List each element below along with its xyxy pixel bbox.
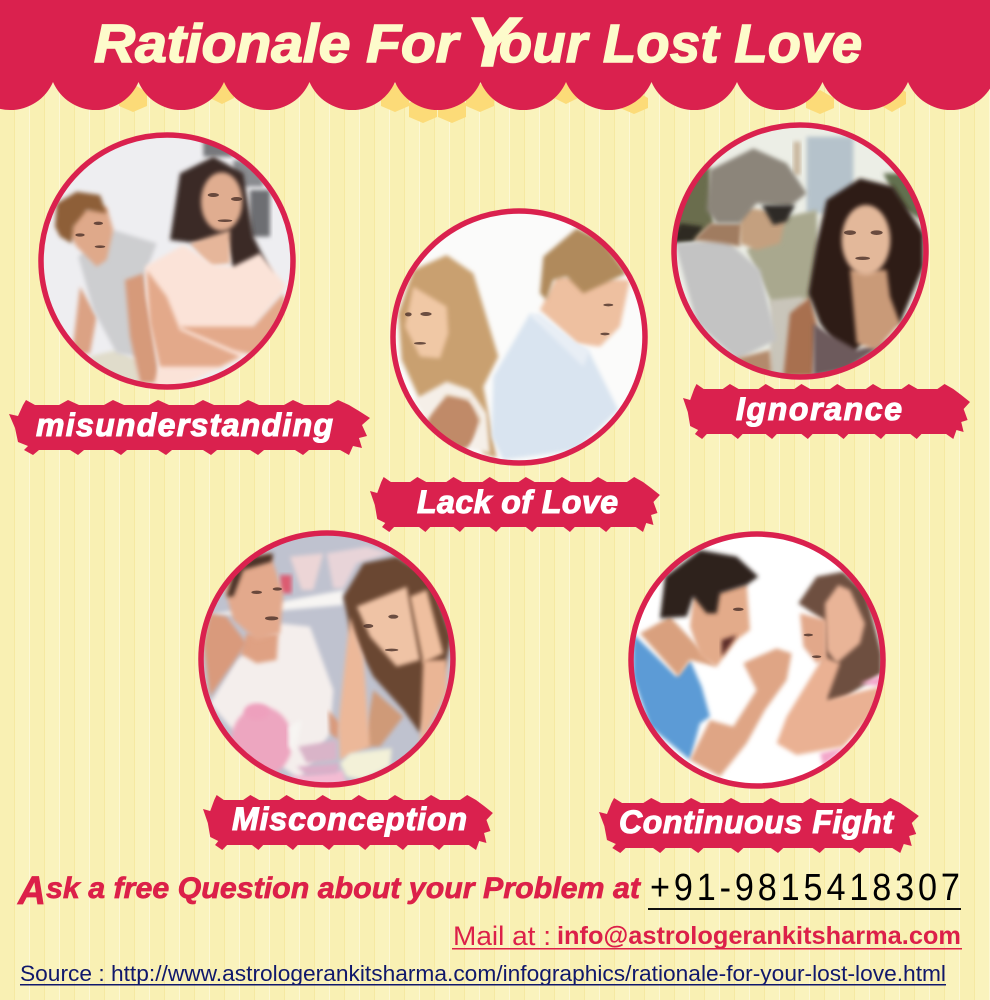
title xyxy=(94,3,862,81)
photo circle: misunderstanding couple xyxy=(38,132,296,390)
title: Rationale For xyxy=(94,14,461,74)
photo circle: misconception couple xyxy=(198,530,456,788)
title: Y xyxy=(466,3,522,81)
phone number: +91-9815418307 xyxy=(650,865,960,908)
header scalloped banner xyxy=(0,0,990,110)
source line: Source : http://www.astrologerankitsharma.com/infographics/rationale-for-your-lost-love.html xyxy=(20,961,946,986)
label: ignorance: Ignorance xyxy=(736,391,902,427)
label: ignorance xyxy=(683,384,970,439)
call to action text: sk a free Question about your Problem at xyxy=(46,872,642,905)
title: our Lost Love xyxy=(499,14,862,74)
label: lack of love: Lack of Love xyxy=(417,484,618,520)
honeycomb decoration behind header xyxy=(119,80,906,123)
photo circle: continuous fight couple xyxy=(628,531,886,789)
email line: Mail at : xyxy=(453,921,551,951)
label: misconception xyxy=(203,795,493,850)
email line: info@astrologerankitsharma.com xyxy=(557,922,961,950)
label: lack of love xyxy=(370,477,660,532)
label: misunderstanding: misunderstanding xyxy=(36,407,333,443)
photo circle: lack of love couple xyxy=(390,208,648,466)
label: continuous fight: Continuous Fight xyxy=(619,804,894,840)
call to action text: A xyxy=(17,869,46,913)
label: misconception: Misconception xyxy=(232,801,467,837)
photo circle: ignorance couple xyxy=(670,122,929,380)
label: continuous fight xyxy=(599,798,919,853)
label: misunderstanding xyxy=(9,400,370,455)
